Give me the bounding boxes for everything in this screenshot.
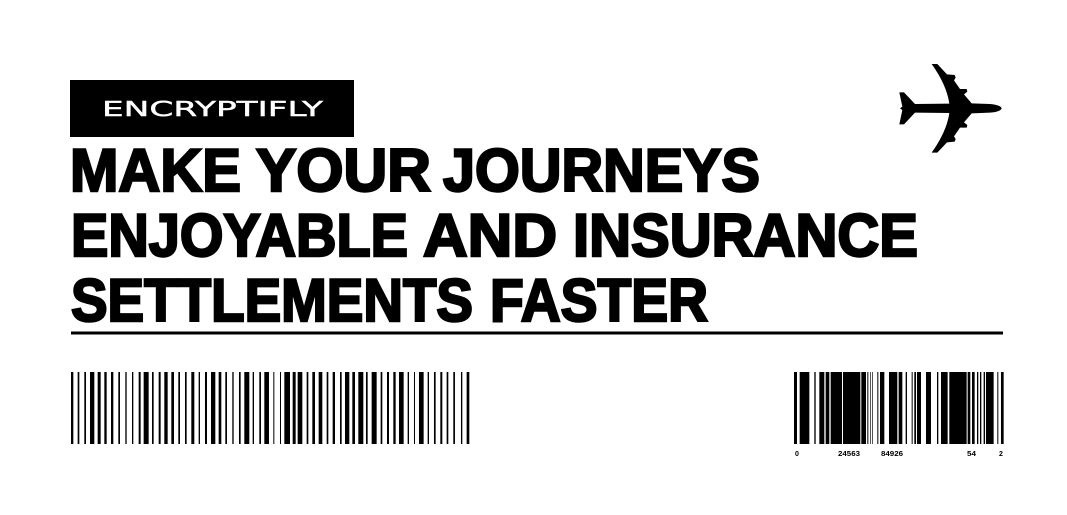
icon: airplane xyxy=(899,64,1002,153)
barcode: left xyxy=(71,372,469,444)
barcode: right with digits: 2 xyxy=(999,451,1003,458)
title: YOUR xyxy=(256,137,431,204)
barcode: right with digits xyxy=(794,372,1004,458)
title: JOURNEYS xyxy=(443,137,760,204)
title: INSURANCE xyxy=(573,202,918,269)
title: ENJOYABLE xyxy=(71,202,408,269)
barcode: right with digits: 24563 xyxy=(838,451,860,458)
brand label: Encryptifly xyxy=(70,80,354,137)
divider line xyxy=(71,332,1003,334)
barcode: right with digits: 54 xyxy=(967,451,976,458)
title: AND xyxy=(423,202,557,269)
title xyxy=(70,137,918,334)
title: SETTLEMENTS xyxy=(71,267,473,334)
title: FASTER xyxy=(490,267,708,334)
barcode: right with digits: 0 xyxy=(795,451,799,458)
title: MAKE xyxy=(70,137,241,204)
brand label: Encryptifly: ENCRYPTIFLY xyxy=(102,97,324,121)
barcode: right with digits: 84926 xyxy=(881,451,903,458)
